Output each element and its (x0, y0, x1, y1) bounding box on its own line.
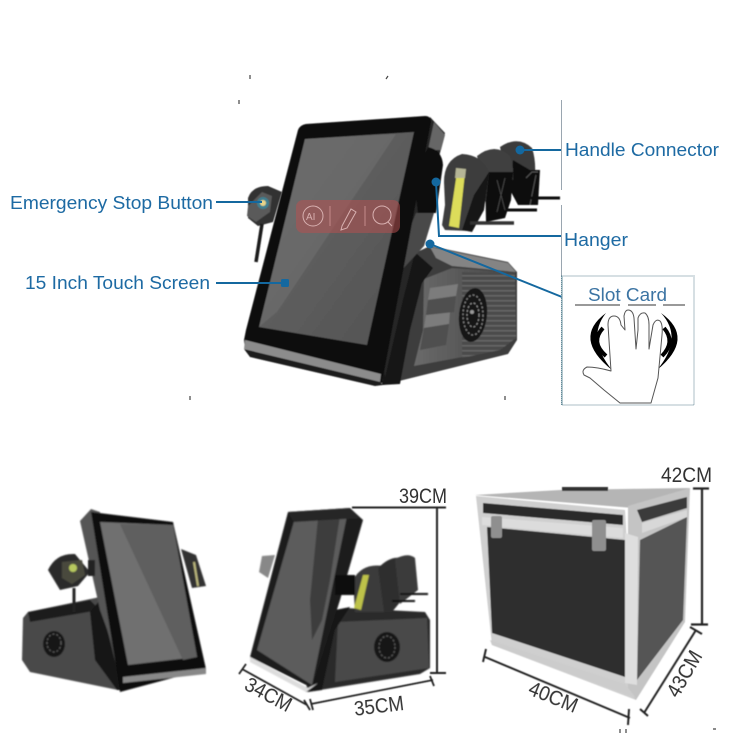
callout: Hanger (432, 178, 628, 250)
label: 42CM: 42CM (661, 464, 712, 487)
bottom-middle device view (250, 508, 430, 692)
touch screen (259, 132, 414, 345)
base (306, 608, 430, 692)
dimension lines: device (239, 508, 446, 710)
pillar (625, 533, 638, 685)
front panel (476, 496, 636, 700)
dimension: 43CM depth (640, 627, 702, 716)
base strip (244, 340, 381, 382)
screen bezel (244, 116, 431, 383)
divider lines near callouts (560, 100, 562, 276)
callout: Hanger: Hanger (564, 230, 628, 250)
callout: 15 Inch Touch Screen (25, 273, 289, 293)
device rear shell (378, 117, 445, 378)
dimension: 40CM width (483, 649, 630, 725)
callout: Handle Connector: Handle Connector (565, 140, 719, 160)
callout: Emergency Stop Button: Emergency Stop Button (10, 193, 213, 213)
fan (43, 631, 65, 657)
handles on the right (442, 141, 560, 232)
case lid (475, 488, 690, 508)
red watermark icons (296, 200, 400, 233)
front handle (442, 154, 514, 232)
label: 39CM: 39CM (399, 485, 447, 508)
rear handle (500, 141, 560, 205)
top frame (483, 503, 623, 525)
device base (370, 246, 517, 385)
flight case (475, 487, 690, 700)
side panel (628, 488, 690, 700)
red watermark icons: AI (306, 212, 315, 223)
latches (491, 516, 502, 538)
bottom-left device view (22, 509, 206, 692)
dimension lines: case (483, 488, 709, 725)
handles (353, 566, 385, 612)
label: 34CM: 34CM (241, 673, 296, 717)
handle right (181, 549, 206, 588)
callout connector: Slot Card (426, 240, 562, 297)
panel: slot card (562, 276, 694, 405)
strip (123, 668, 206, 683)
dimension: 39CM height (352, 508, 446, 673)
main device illustration (244, 116, 517, 386)
base (22, 597, 122, 690)
hanger bracket on side (416, 147, 443, 213)
case handle (562, 487, 608, 491)
label: 40CM: 40CM (525, 677, 581, 718)
slot card heading: Slot Card (588, 284, 667, 305)
bottom frame (490, 640, 636, 698)
icon: hand (583, 310, 662, 403)
bezel (91, 512, 206, 692)
callout: 15 Inch Touch Screen: 15 Inch Touch Screen (25, 273, 210, 293)
label: 43CM: 43CM (662, 647, 707, 702)
dimension: 42CM height (691, 488, 709, 624)
device fan (456, 287, 490, 343)
stray marks (190, 75, 716, 733)
dimension: 35CM width (310, 676, 434, 710)
icon: waves (590, 313, 612, 370)
screen side (250, 508, 363, 688)
screen (100, 522, 197, 665)
handle left (48, 554, 90, 590)
label: 35CM: 35CM (353, 692, 405, 721)
middle handle (477, 149, 537, 222)
fan (374, 632, 400, 662)
dimension: 34CM depth (239, 664, 310, 710)
shell (80, 509, 122, 665)
emergency stop handle (247, 186, 282, 262)
